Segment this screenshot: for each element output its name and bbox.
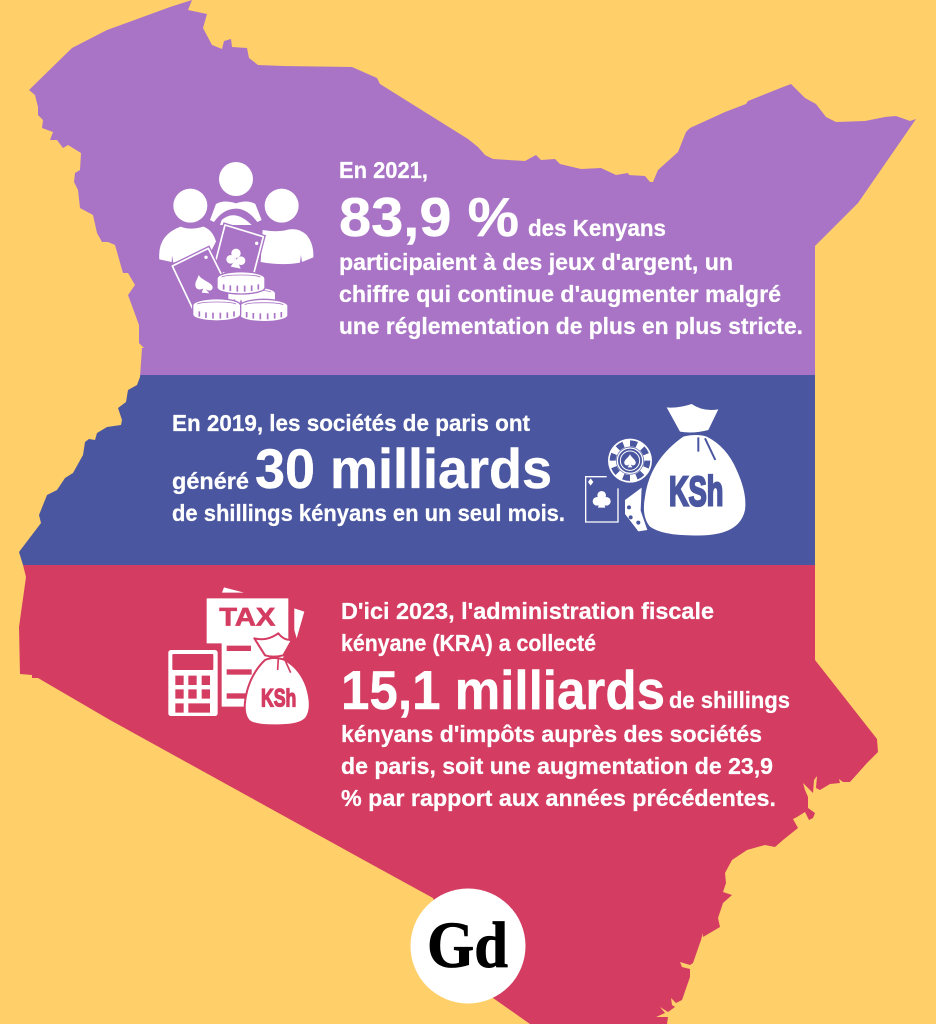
body line 3: une réglementation de plus en plus stricte. bbox=[339, 313, 803, 339]
intro line 2: kényane (KRA) a collecté bbox=[341, 630, 596, 656]
band: red bbox=[0, 565, 936, 1024]
icon: tax sheet, calculator and money bag: TAX bbox=[219, 604, 275, 632]
body line 2: chiffre qui continue d'augmenter malgré bbox=[339, 281, 781, 307]
logo: Gd: Gd bbox=[427, 909, 508, 982]
figure label: des Kenyans bbox=[528, 215, 666, 241]
intro line: En 2021, bbox=[339, 157, 428, 183]
icon: people, cards and coins bbox=[159, 162, 313, 322]
closing line: de shillings kényans en un seul mois. bbox=[172, 500, 565, 526]
intro line 1: D'ici 2023, l'administration fiscale bbox=[341, 598, 714, 624]
lead-in word: généré bbox=[172, 468, 249, 494]
band: blue bbox=[19, 375, 815, 565]
logo: Gd bbox=[410, 888, 526, 1004]
icon: money bag, chip, card and die: KSh bbox=[669, 468, 723, 515]
body line 2: de paris, soit une augmentation de 23,9 bbox=[341, 753, 773, 779]
text block: 15,1 milliards bbox=[341, 598, 790, 811]
big figure: 83,9 % bbox=[339, 186, 519, 248]
big figure: 30 milliards bbox=[255, 437, 552, 500]
band: purple bbox=[0, 0, 936, 375]
icon: tax sheet, calculator and money bag: KSh bbox=[261, 686, 296, 713]
icon: tax sheet, calculator and money bag bbox=[168, 587, 310, 725]
text block: 30 milliards bbox=[172, 410, 565, 526]
body line 3: % par rapport aux années précédentes. bbox=[341, 785, 776, 811]
body line 1: participaient à des jeux d'argent, un bbox=[339, 249, 733, 275]
intro line: En 2019, les sociétés de paris ont bbox=[172, 410, 530, 436]
figure label: de shillings bbox=[669, 687, 790, 713]
big figure: 15,1 milliards bbox=[341, 659, 665, 721]
icon: money bag, chip, card and die bbox=[586, 404, 745, 535]
text block: 83,9 % bbox=[339, 157, 803, 339]
body line 1: kényans d'impôts auprès des sociétés bbox=[341, 721, 762, 747]
